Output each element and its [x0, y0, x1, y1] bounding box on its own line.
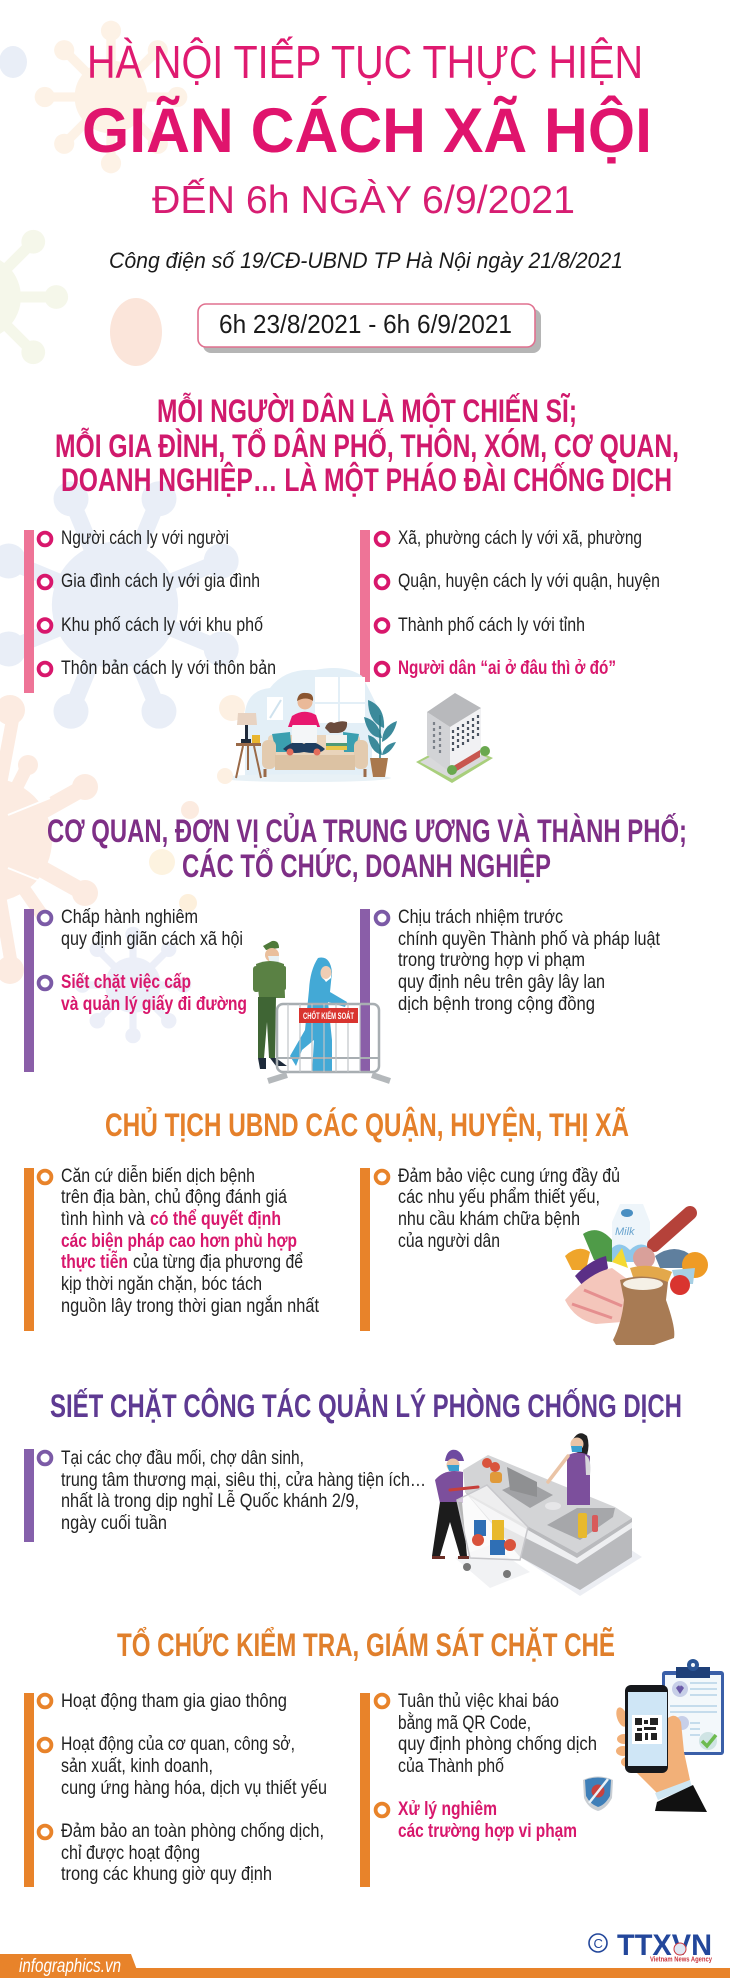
panel: isolation list left	[24, 528, 276, 693]
panel: agencies right: quy định nêu trên gây lây lan	[398, 972, 605, 993]
sign: CHỐT KIỂM SOÁT	[303, 1010, 354, 1021]
panel: inspection left: trong các khung giờ quy định	[61, 1864, 272, 1885]
heading: section 2	[47, 813, 687, 884]
panel: isolation list right: Quận, huyện cách ly với quận, huyện	[398, 571, 660, 592]
logo: TTXVN: Vietnam News Agency	[650, 1956, 712, 1964]
title: GIÃN CÁCH XÃ HỘI	[82, 95, 652, 166]
cart	[457, 1485, 528, 1578]
heading: section 2: CÁC TỔ CHỨC, DOANH NGHIỆP	[182, 848, 551, 884]
counter	[463, 1455, 632, 1590]
customer	[432, 1450, 478, 1559]
panel: epidemic control: Tại các chợ đầu mối, chợ dân sinh,	[61, 1448, 304, 1469]
panel: epidemic control: trung tâm thương mại, siêu thị, cửa hàng tiện ích…	[61, 1470, 426, 1491]
phone	[625, 1685, 668, 1773]
panel: inspection right: quy định phòng chống dịch	[398, 1734, 597, 1755]
panel: district chairs left	[24, 1165, 320, 1331]
title	[82, 36, 652, 222]
panel: district chairs left: kịp thời ngăn chặn, bóc tách	[61, 1274, 262, 1295]
panel: agencies left	[24, 907, 247, 1072]
illustration: supermarket checkout	[432, 1433, 642, 1596]
panel: inspection right: các trường hợp vi phạm	[398, 1821, 577, 1842]
panel: district chairs right: các nhu yếu phẩm thiết yếu,	[398, 1187, 600, 1208]
medic	[290, 958, 347, 1073]
panel: district chairs right: của người dân	[398, 1231, 500, 1252]
cat	[325, 721, 347, 733]
background: virus decorations	[0, 21, 288, 1043]
panel: district chairs left: của từng địa phương để	[133, 1252, 303, 1273]
panel: agencies right: dịch bệnh trong cộng đồng	[398, 994, 595, 1015]
panel: district chairs left: các biện pháp cao hơn phù hợp	[61, 1231, 297, 1252]
subtitle: official dispatch: Công điện số 19/CĐ-UBND TP Hà Nội ngày 21/8/2021	[109, 248, 623, 273]
panel: epidemic control: nhất là trong dịp nghỉ Lễ Quốc khánh 2/9,	[61, 1490, 359, 1512]
person	[283, 693, 325, 756]
sleeve	[655, 1780, 707, 1812]
panel: inspection left: cung ứng hàng hóa, dịch vụ thiết yếu	[61, 1778, 327, 1799]
panel: isolation list left: Gia đình cách ly với gia đình	[61, 571, 260, 592]
panel: isolation list left: Người cách ly với người	[61, 528, 229, 549]
barrier	[268, 1004, 390, 1081]
panel: inspection right: Xử lý nghiêm	[398, 1799, 497, 1820]
panel: agencies left: Siết chặt việc cấp	[61, 972, 191, 993]
illustration: person working at home on sofa	[217, 668, 397, 784]
panel: isolation list right: Xã, phường cách ly với xã, phường	[398, 528, 642, 549]
panel: district chairs right	[360, 1166, 620, 1331]
panel: isolation list right: Người dân “ai ở đâu thì ở đó”	[398, 658, 616, 679]
panel: isolation list left: Thôn bản cách ly với thôn bản	[61, 658, 276, 679]
lamp and table	[236, 713, 261, 778]
panel: inspection left: Hoạt động tham gia giao thông	[61, 1691, 287, 1712]
clipboard	[662, 1659, 724, 1755]
footer band: infographics.vn	[19, 1956, 121, 1977]
illustration: food and essentials	[565, 1204, 708, 1345]
logo: TTXVN: C	[594, 1936, 603, 1951]
panel: agencies right: chính quyền Thành phố và pháp luật	[398, 929, 661, 950]
title: ĐẾN 6h NGÀY 6/9/2021	[152, 178, 575, 222]
panel: inspection right	[360, 1691, 597, 1887]
panel: district chairs left: có thể quyết định	[150, 1209, 281, 1230]
heading: section 1	[55, 393, 679, 498]
panel: agencies right: Chịu trách nhiệm trước	[398, 907, 563, 928]
plant	[364, 700, 397, 777]
illustration: apartment building	[416, 693, 493, 783]
panel: epidemic control	[24, 1448, 426, 1542]
date box	[198, 304, 541, 353]
panel: district chairs right: nhu cầu khám chữa bệnh	[398, 1209, 580, 1230]
panel: inspection right: bằng mã QR Code,	[398, 1712, 531, 1734]
panel: district chairs left: thực tiễn	[61, 1251, 128, 1273]
illustration: checkpoint with soldier and medic	[253, 941, 390, 1081]
panel: epidemic control: ngày cuối tuần	[61, 1513, 167, 1534]
panel: agencies left: và quản lý giấy đi đường	[61, 994, 247, 1015]
date box: 6h 23/8/2021 - 6h 6/9/2021	[219, 309, 512, 339]
panel: inspection left: Hoạt động của cơ quan, công sở,	[61, 1734, 295, 1755]
panel: district chairs left: trên địa bàn, chủ động đánh giá	[61, 1187, 287, 1208]
panel: inspection right: của Thành phố	[398, 1756, 504, 1777]
footer band	[0, 1954, 730, 1978]
panel: agencies left: quy định giãn cách xã hội	[61, 929, 243, 950]
panel: inspection right: Tuân thủ việc khai báo	[398, 1691, 559, 1712]
panel: district chairs left: Căn cứ diễn biến dịch bệnh	[61, 1165, 255, 1187]
icon: virus shield	[583, 1776, 613, 1811]
panel: agencies left: Chấp hành nghiêm	[61, 907, 198, 928]
panel: isolation list right: Thành phố cách ly với tỉnh	[398, 615, 585, 636]
panel: isolation list right	[360, 528, 660, 682]
illustration: food and essentials: Milk	[615, 1226, 635, 1238]
title: HÀ NỘI TIẾP TỤC THỰC HIỆN	[87, 36, 643, 88]
panel: district chairs left: nguồn lây trong thời gian ngắn nhất	[61, 1295, 320, 1317]
panel: agencies right: trong trường hợp vi phạm	[398, 950, 585, 971]
sofa	[262, 732, 368, 777]
panel: isolation list left: Khu phố cách ly với khu phố	[61, 615, 263, 636]
logo: TTXVN: TTXVN	[617, 1929, 712, 1962]
soldier	[253, 941, 287, 1069]
sign	[299, 1008, 358, 1023]
panel: agencies right	[360, 907, 661, 1072]
hand back	[614, 1706, 690, 1794]
cashier	[548, 1433, 590, 1505]
heading: section 1: MỖI NGƯỜI DÂN LÀ MỘT CHIẾN SĨ;	[157, 393, 577, 429]
panel: district chairs right: Đảm bảo việc cung ứng đầy đủ	[398, 1166, 620, 1187]
illustration: phone with QR code and clipboard	[614, 1659, 724, 1812]
panel: inspection left: Đảm bảo an toàn phòng chống dịch,	[61, 1821, 324, 1842]
panel: inspection left: sản xuất, kinh doanh,	[61, 1756, 213, 1777]
panel: inspection left: chỉ được hoạt động	[61, 1843, 200, 1864]
panel: district chairs left: tình hình và	[61, 1209, 145, 1230]
panel: inspection left	[24, 1691, 327, 1887]
